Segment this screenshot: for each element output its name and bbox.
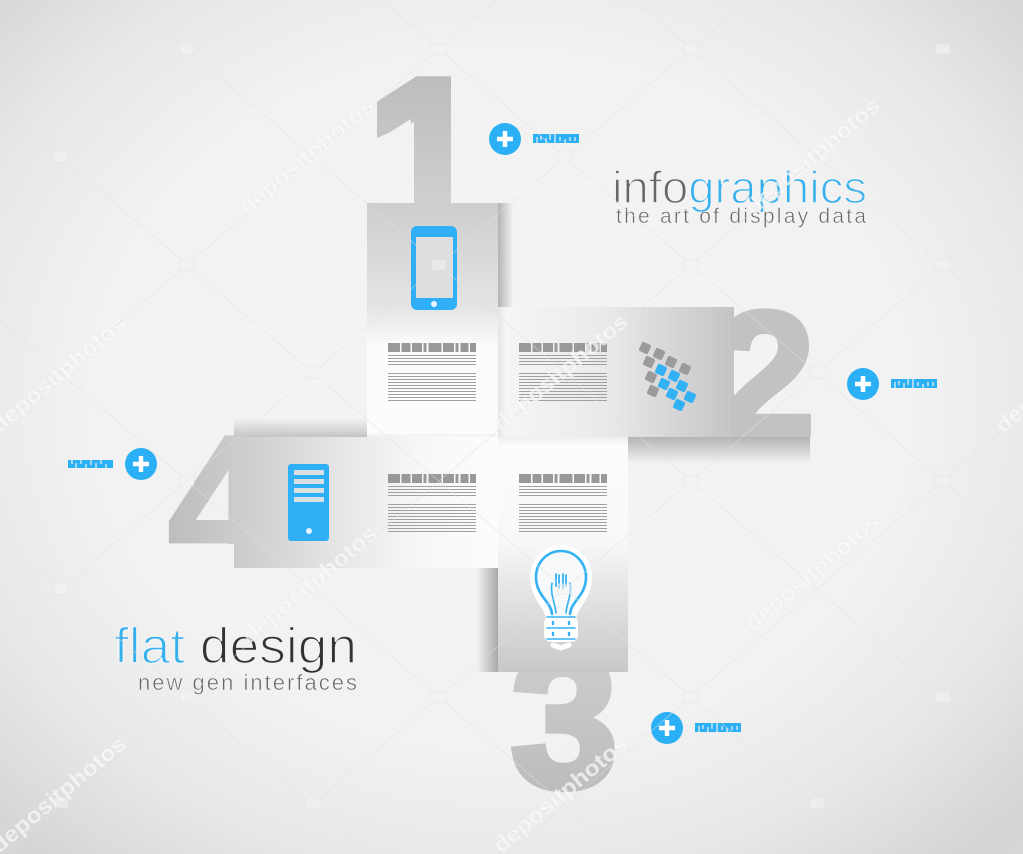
panel 3 left shadow: [477, 568, 498, 672]
panel 1: [367, 203, 513, 434]
callout: step 4 plus button and label: [68, 448, 157, 480]
watermark text: depositphotos: [740, 509, 885, 636]
shadow below panel 2: [628, 437, 810, 464]
panel 1 right fold shadow: [498, 203, 513, 307]
text block placeholder: panel 3: [519, 478, 607, 532]
number 4: 4: [168, 397, 274, 609]
number 1: 1: [364, 33, 489, 285]
number 2: 2: [715, 275, 815, 476]
watermark text: depositphotos: [234, 93, 379, 220]
number 3: 3: [511, 612, 618, 827]
icon: pixel arrow: [638, 341, 697, 412]
icon: server tower: [288, 464, 329, 541]
text block placeholder: panel 2: [519, 348, 607, 400]
heading: flat design: flat design: [114, 618, 357, 674]
text block placeholder: panel 1: [388, 348, 476, 400]
subtitle: the art of display data: the art of display data: [616, 205, 866, 228]
callout: step 1 plus button and label: [489, 123, 579, 155]
title: infographics: infographics: [612, 162, 867, 213]
callout: step 2 plus button and label: [847, 368, 937, 400]
watermark text: depositphotos: [740, 93, 885, 220]
icon: smartphone: [411, 226, 457, 310]
panel 2 left fold: [498, 307, 506, 437]
shadow above panel 4: [234, 418, 367, 437]
watermark text: depositphotos: [488, 309, 633, 436]
watermark text: depositphotos: [237, 521, 382, 648]
subheading: new gen interfaces: new gen interfaces: [138, 670, 357, 695]
watermark camera icons: [54, 44, 950, 808]
text block placeholder: panel 4: [388, 478, 476, 532]
callout: step 3 plus button and label: [651, 712, 741, 744]
panel 2: [498, 307, 734, 437]
panel 3 top shade: [498, 437, 628, 447]
panel 3: [498, 437, 628, 672]
panel 4: [234, 437, 498, 568]
icon: light bulb: [533, 548, 589, 648]
